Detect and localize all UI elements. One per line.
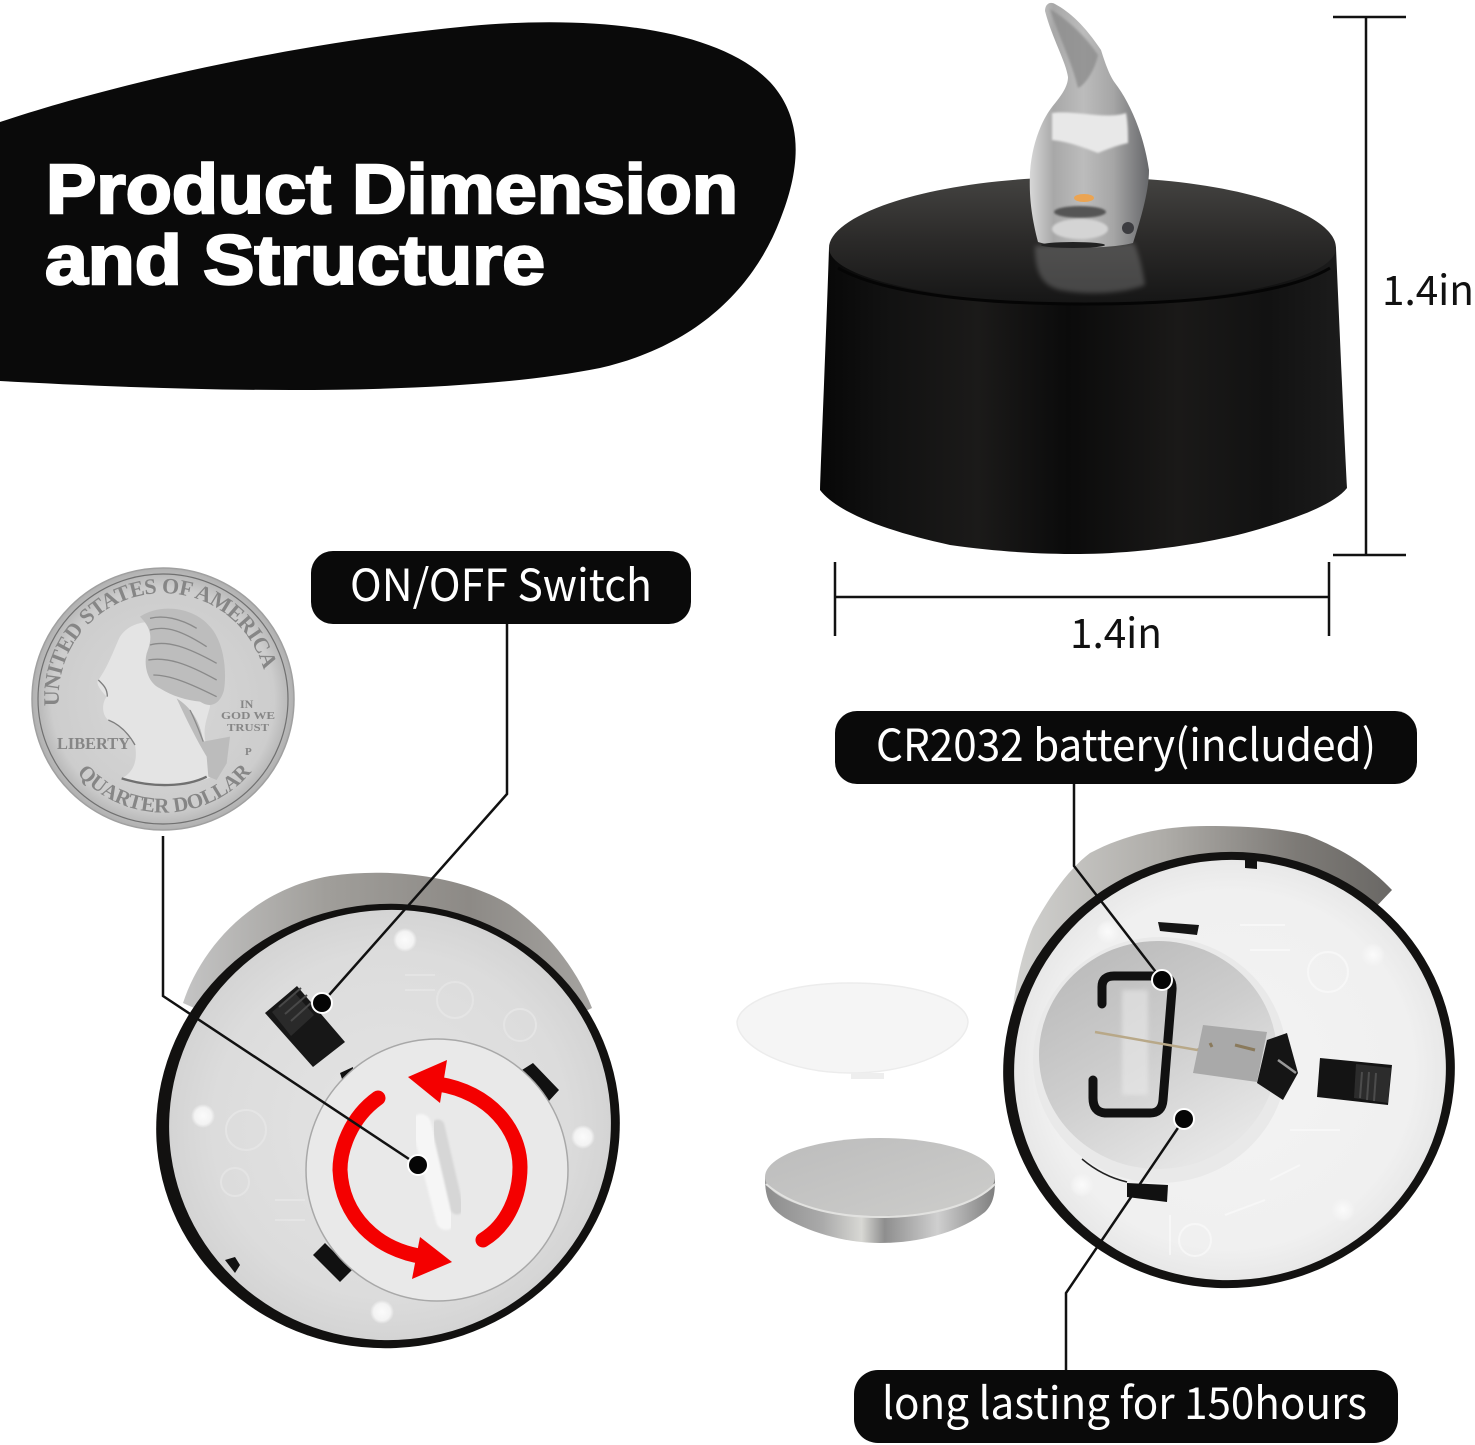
coin lettering: LIBERTY [57, 734, 130, 753]
cover disc [306, 1039, 568, 1301]
title banner [0, 22, 796, 390]
coin lettering [44, 578, 276, 813]
coin lettering: QUARTER DOLLAR [80, 766, 252, 813]
wire [1095, 1032, 1210, 1050]
coin lettering: P [245, 746, 252, 758]
cover disc: white [737, 983, 968, 1079]
cover tabs [313, 1063, 559, 1282]
height dimension [1333, 17, 1474, 555]
title text: Product Dimension [46, 150, 738, 228]
base dots [191, 928, 595, 1324]
title text: and Structure [45, 221, 545, 299]
switch [265, 986, 345, 1067]
label: long lasting: long lasting for 150hours [882, 1368, 1367, 1432]
label: CR2032 battery: CR2032 battery(included) [876, 710, 1376, 774]
rim tab [1245, 858, 1257, 869]
switch [1317, 1058, 1392, 1105]
embossed marks [1170, 925, 1348, 1256]
icon: red rotate arrows [340, 1060, 520, 1279]
clip contact [1093, 976, 1172, 1113]
coin lettering: TRUST [227, 722, 270, 734]
compartment [1033, 937, 1287, 1183]
candle photo: side view [820, 3, 1347, 554]
rim tab [225, 1257, 240, 1273]
coin: quarter dollar [31, 567, 295, 831]
flame reflection [1035, 243, 1145, 293]
leader lines: left [163, 624, 507, 1175]
icon: flame [1030, 3, 1149, 248]
embossed marks [221, 975, 536, 1220]
candle base: left, with switch and cover [127, 873, 649, 1378]
height label: 1.4in [1382, 257, 1474, 317]
tabs [1158, 922, 1199, 935]
candle base: right, open compartment [975, 823, 1475, 1317]
battery: coin cell [765, 1138, 995, 1243]
slot [421, 1124, 446, 1220]
coin lettering: UNITED STATES OF AMERICA [44, 578, 276, 706]
width dimension [835, 562, 1329, 660]
portrait [97, 609, 230, 785]
title text [45, 150, 738, 299]
coin lettering: IN [240, 697, 254, 711]
coin lettering: GOD WE [221, 710, 275, 722]
label: ON/OFF Switch: ON/OFF Switch [350, 550, 652, 614]
plate [1193, 1025, 1267, 1082]
width label: 1.4in [1070, 600, 1162, 660]
base dots [1070, 920, 1385, 1222]
leader lines: right [1066, 784, 1194, 1370]
